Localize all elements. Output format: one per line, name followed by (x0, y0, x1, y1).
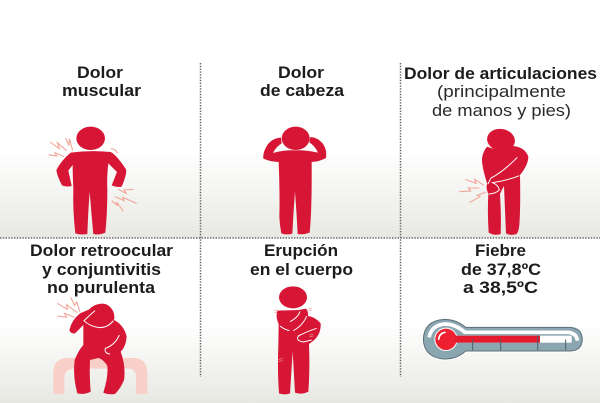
heading: dolor de cabeza: Dolor (278, 63, 324, 82)
panel: dolor muscular (49, 63, 141, 235)
text: principalmente de manos y pies: (principalmente (437, 82, 566, 101)
heading: dolor de articulaciones: Dolor de articulaciones (404, 64, 597, 83)
heading: dolor retroocular (30, 241, 173, 297)
icon: thermometer (423, 319, 582, 359)
heading: erupcion en el cuerpo (250, 241, 353, 279)
panel: dolor de cabeza (260, 63, 345, 234)
icon: person with rash (274, 286, 321, 394)
heading: dolor retroocular: Dolor retroocular (30, 241, 173, 260)
heading: dolor de cabeza (260, 63, 345, 100)
panel: dolor de articulaciones (404, 64, 597, 235)
text: principalmente de manos y pies: de manos y pies) (432, 101, 571, 120)
icon: seated person with eye pain (53, 297, 147, 394)
heading: dolor muscular: muscular (62, 81, 141, 100)
heading: fiebre: a 38,5ºC (463, 278, 538, 297)
icon: person with joint pain (459, 127, 528, 235)
heading: dolor de cabeza: de cabeza (260, 81, 345, 100)
panel: erupcion en el cuerpo (250, 241, 353, 394)
heading: erupcion en el cuerpo: Erupción (264, 241, 338, 260)
heading: fiebre: de 37,8ºC (461, 260, 541, 279)
panel: fiebre (423, 241, 582, 359)
icon: person holding head (263, 127, 326, 234)
icon: person with muscle pain (49, 127, 137, 235)
heading: dolor muscular (62, 63, 141, 100)
heading: fiebre: Fiebre (475, 241, 526, 260)
heading: dolor retroocular: y conjuntivitis (42, 260, 161, 279)
heading: fiebre (461, 241, 541, 297)
text: principalmente de manos y pies (432, 82, 571, 120)
panel: dolor retroocular (30, 241, 173, 394)
heading: dolor muscular: Dolor (77, 63, 123, 82)
heading: erupcion en el cuerpo: en el cuerpo (250, 260, 353, 279)
heading: dolor retroocular: no purulenta (47, 278, 156, 297)
icon: seat (53, 358, 147, 394)
